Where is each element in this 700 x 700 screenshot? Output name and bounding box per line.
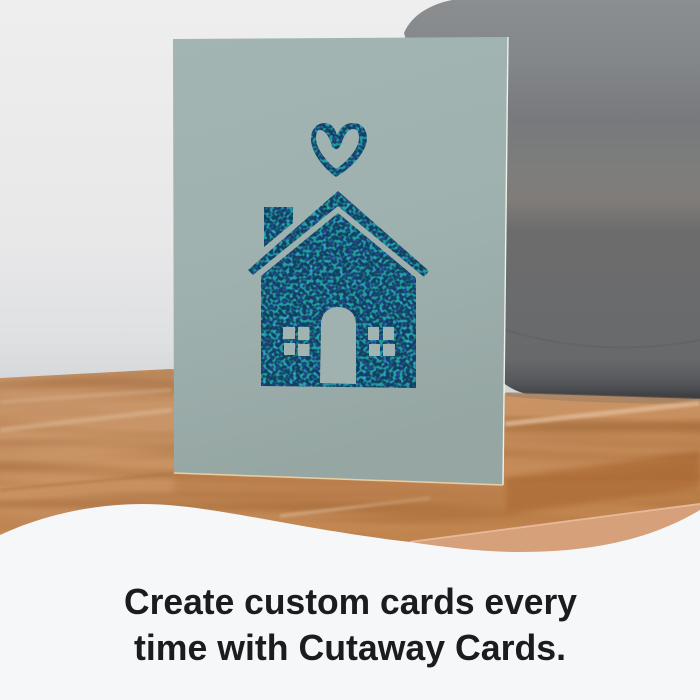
card body — [173, 37, 508, 485]
background wall — [0, 0, 700, 400]
white wave panel — [0, 504, 700, 700]
right window — [368, 327, 395, 356]
card shadow — [174, 473, 505, 515]
icon: glitter heart cut-out — [311, 123, 367, 177]
grey vase — [404, 0, 700, 399]
wooden table — [0, 369, 700, 560]
chimney — [264, 207, 293, 247]
house body — [261, 213, 416, 388]
greeting card — [173, 37, 508, 485]
caption: Create custom cards every — [124, 581, 577, 622]
caption — [124, 581, 577, 668]
caption: time with Cutaway Cards. — [134, 627, 566, 668]
roof — [248, 191, 429, 277]
door — [320, 307, 356, 384]
left window — [283, 327, 310, 356]
icon: glitter house cut-out — [248, 191, 429, 388]
